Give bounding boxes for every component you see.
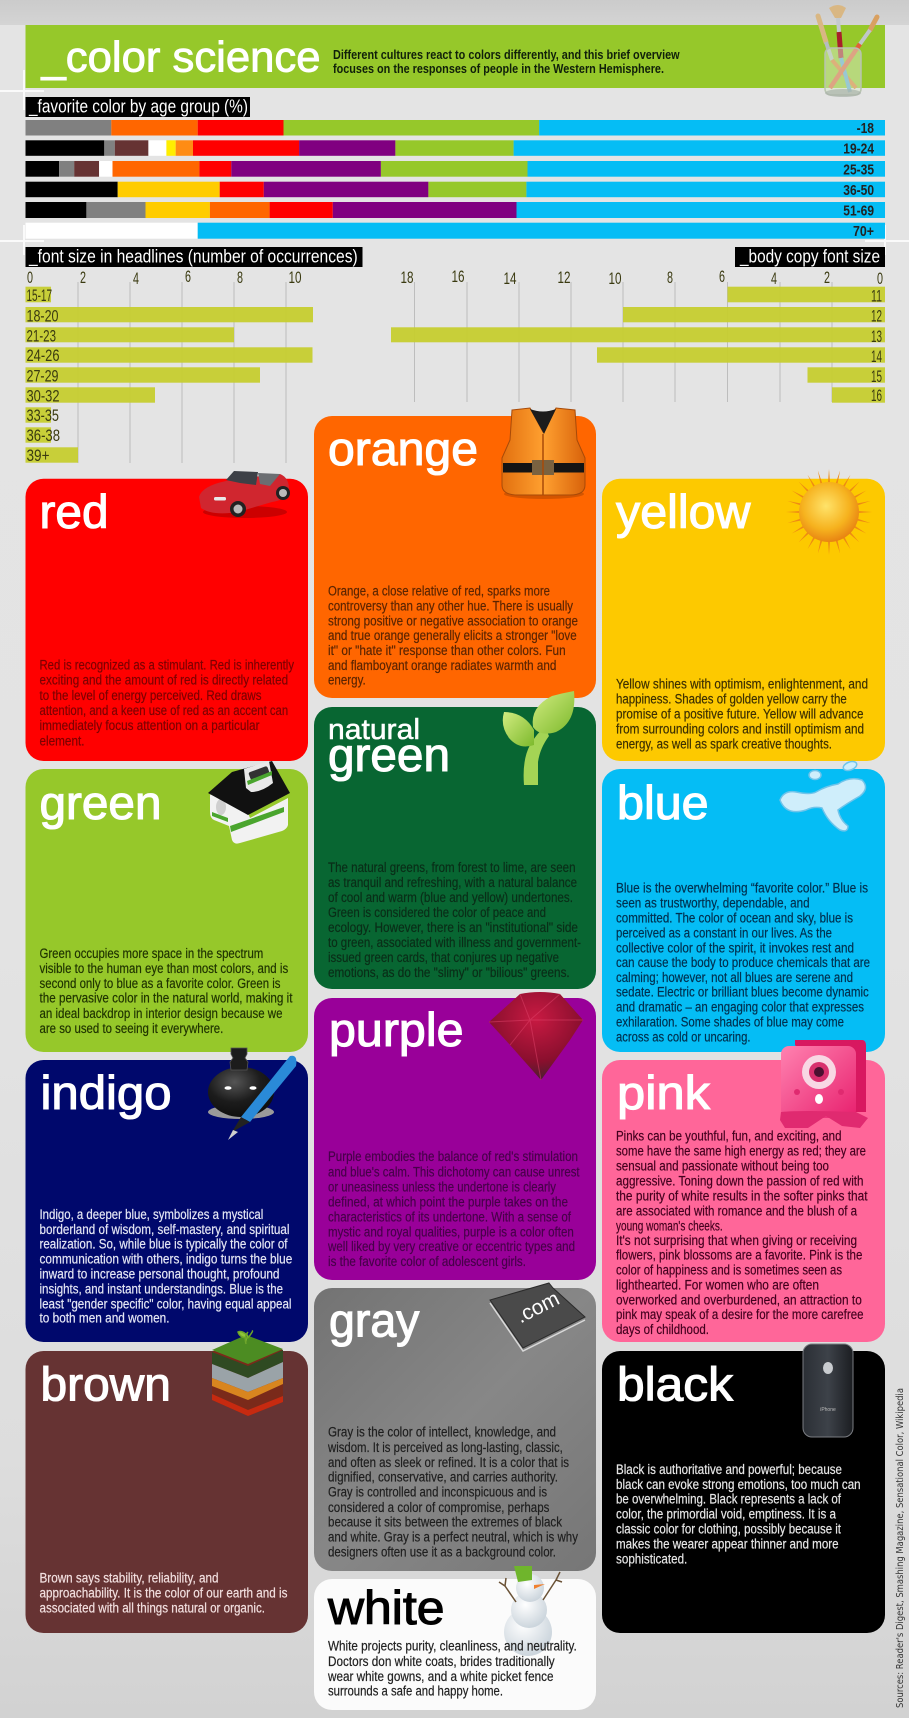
intro text xyxy=(333,48,680,76)
row labels: headline sizes: 24-26 xyxy=(26,346,60,365)
row labels: body copy sizes: 15 xyxy=(871,367,882,386)
icon: snowman xyxy=(499,1566,562,1656)
body text: The natural greens, from forest to lime, are seen xyxy=(328,860,576,875)
body text: associated with all things natural or organic. xyxy=(40,1600,265,1615)
body text: committed. The color of ocean and sky, blue is xyxy=(616,910,853,925)
panel: black xyxy=(602,1344,885,1633)
icon: sun xyxy=(786,469,872,555)
heading: green: green xyxy=(328,728,450,781)
row labels: headline sizes: 30-32 xyxy=(26,386,60,406)
body text: pink may speak of a desire for the more carefree xyxy=(616,1307,864,1322)
body text: to both men and women. xyxy=(40,1311,170,1326)
icon: ink bottle and pen xyxy=(208,1048,296,1140)
row labels: headline sizes: 33-35 xyxy=(26,406,59,425)
body text xyxy=(327,1149,580,1269)
icon: pink one-eyed monster xyxy=(780,1040,868,1128)
axis numbers: headlines: 0 xyxy=(27,268,33,287)
heading: green xyxy=(40,776,162,829)
body text: attention, and a keen use of red as an accent can xyxy=(40,703,288,718)
body text: issued green cards, that conjures up negative xyxy=(328,950,559,965)
panel: yellow xyxy=(602,469,885,761)
body text: borderland of wisdom, self-mastery, and spiritual xyxy=(40,1222,290,1237)
axis numbers: body copy: 2 xyxy=(824,268,830,287)
row labels: body copy sizes: 13 xyxy=(871,327,882,346)
body text: calming; however, not all blues are serene and xyxy=(616,970,853,985)
bar: 70 plus: 70+ xyxy=(853,223,874,240)
body text: approachability. It is the color of our earth and is xyxy=(40,1586,288,1601)
body text: lighthearted. For women who are often xyxy=(616,1277,819,1292)
body text: young woman's cheeks. xyxy=(616,1218,723,1233)
bar: 36-50 xyxy=(26,182,885,199)
bar: 51-69: 51-69 xyxy=(843,203,874,220)
body text: surrounds a safe and happy home. xyxy=(328,1684,503,1699)
body text: are so used to seeing it everywhere. xyxy=(40,1021,223,1036)
body text: and dramatic – an engaging color that expresses xyxy=(616,1000,864,1015)
body text: inward to increase personal thought, profound xyxy=(40,1267,280,1282)
bars: body copy sizes xyxy=(391,287,885,403)
axis numbers: body copy: 18 xyxy=(400,268,414,287)
body text: exciting and the amount of red is directly related xyxy=(40,673,288,688)
body text: energy, as well as spark creative thoughts. xyxy=(616,736,832,751)
body text: exhilaration. Some shades of blue may come xyxy=(616,1015,844,1030)
row labels: headline sizes: 21-23 xyxy=(26,326,56,346)
body text: to green, associated with illness and government- xyxy=(328,935,581,950)
body text xyxy=(616,676,868,751)
panel: brown xyxy=(26,1331,308,1633)
body text: Pinks can be youthful, fun, and exciting, and xyxy=(616,1129,842,1144)
panel: green xyxy=(26,761,308,1052)
heading: brown xyxy=(40,1358,171,1411)
icon: green sprout xyxy=(503,691,574,785)
body text: White projects purity, cleanliness, and neutrality. xyxy=(328,1639,577,1654)
heading: gray xyxy=(329,1294,420,1347)
body text: realization. So, while blue is typically the color of xyxy=(40,1236,288,1251)
body text: and often as sleek or refined. It is a color that is xyxy=(328,1455,569,1470)
axis numbers: body copy: 6 xyxy=(719,267,725,286)
body text xyxy=(40,1207,292,1326)
body text xyxy=(327,1639,577,1699)
icon: dot-com folder: .com xyxy=(512,1287,563,1328)
body text: from surrounding colors and instill optimism and xyxy=(616,721,864,736)
body text: Black is authoritative and powerful; because xyxy=(616,1462,842,1477)
icon: green and white house xyxy=(208,761,290,844)
body text: Gray is the color of intellect, knowledge, and xyxy=(328,1425,556,1440)
header banner xyxy=(26,5,885,97)
body text: be overwhelming. Black represents a lack of xyxy=(616,1492,841,1507)
heading: natural: natural xyxy=(328,714,420,746)
panel: gray xyxy=(314,1283,596,1571)
body text: Green occupies more space in the spectrum xyxy=(40,946,263,961)
body text: It's not surprising that when giving or receiving xyxy=(616,1233,857,1248)
body text: second only to blue as a favorite color. Green is xyxy=(40,976,281,991)
stacked bar chart: favorite color by age xyxy=(26,120,885,240)
panel: orange xyxy=(314,408,596,698)
axis numbers: headlines: 10 xyxy=(288,268,302,287)
body text: energy. xyxy=(328,673,366,688)
axis numbers: headlines: 8 xyxy=(237,268,243,287)
body text: the purity of white results in the softer pinks that xyxy=(616,1189,868,1204)
panel: blue xyxy=(602,760,885,1052)
heading: white xyxy=(327,1581,444,1634)
body text: wisdom. It is perceived as long-lasting, classic, xyxy=(327,1440,563,1455)
axis numbers: body copy: 16 xyxy=(452,267,464,286)
body text: Purple embodies the balance of red's stimulation xyxy=(328,1149,578,1164)
body text: sensual and passionate without being too xyxy=(616,1159,829,1174)
row labels: headline sizes xyxy=(26,286,60,465)
icon: smartphone xyxy=(803,1344,853,1437)
body text xyxy=(40,658,294,748)
bar: 36-50: 36-50 xyxy=(843,182,874,199)
body text: sedate. Electric or brilliant blues become dynamic xyxy=(616,985,869,1000)
axis numbers: headlines xyxy=(27,267,302,288)
body text: color of happiness and is sometimes seen as xyxy=(616,1262,842,1277)
body text: promise of a positive future. Yellow will advance xyxy=(616,706,864,721)
panel: white xyxy=(314,1566,596,1710)
heading: black xyxy=(617,1358,734,1411)
axis numbers: body copy: 10 xyxy=(608,269,622,288)
body text: of cool and warm (blue and yellow) undertones. xyxy=(328,890,573,905)
body text: communication with others, indigo turns the blue xyxy=(40,1252,292,1267)
heading: orange xyxy=(328,422,478,475)
icon: ruby gem xyxy=(489,992,583,1080)
row labels: headline sizes: 36-38 xyxy=(26,426,60,445)
panel: red xyxy=(26,471,308,761)
body text: characteristics of its undertone. With a sense of xyxy=(328,1209,571,1224)
panel: pink xyxy=(602,1040,885,1342)
body text: Brown says stability, reliability, and xyxy=(40,1571,218,1586)
axis numbers: body copy: 12 xyxy=(558,268,570,287)
axis numbers: headlines: 6 xyxy=(185,267,191,286)
body text: seen as trustworthy, dependable, and xyxy=(616,896,810,911)
bar chart: headline font sizes xyxy=(26,267,313,465)
sources credit: Sources: Reader's Digest, Smashing Magazine, Sensational Color, Wikipedia xyxy=(895,1388,906,1708)
heading: purple xyxy=(329,1003,464,1056)
body text: and true orange generally elicits a stronger "love xyxy=(328,628,577,643)
bar: under 18 xyxy=(26,120,885,137)
bar: 19-24: 19-24 xyxy=(843,141,875,158)
body text: Red is recognized as a stimulant. Red is inherently xyxy=(40,658,294,673)
icon: smartphone: iPhone xyxy=(820,1407,836,1413)
heading: pink xyxy=(617,1066,711,1119)
heading: favorite color by age group: _favorite color by age group (%) xyxy=(28,96,248,118)
row labels: headline sizes: 27-29 xyxy=(26,366,58,386)
body text: makes the wearer appear thinner and more xyxy=(616,1536,839,1551)
body text: is the favorite color of adolescent girls. xyxy=(328,1254,526,1269)
body text xyxy=(328,860,581,980)
body text: it" or "hate it" response than other colors. Fun xyxy=(328,643,566,658)
heading: body copy font size: _body copy font size xyxy=(739,246,880,268)
row labels: body copy sizes: 12 xyxy=(871,306,882,326)
body text: emotions, as do the "slimy" or "bilious" greens. xyxy=(328,965,570,980)
body text: considered a color of compromise, perhaps xyxy=(328,1500,550,1515)
body text: and white. Gray is a perfect neutral, which is why xyxy=(328,1529,578,1544)
body text: and blue's calm. This dichotomy can cause unrest xyxy=(328,1164,580,1179)
body text: insights, and instant understandings. Blue is the xyxy=(40,1281,283,1296)
body text: to the level of energy perceived. Red draws xyxy=(40,688,262,703)
body text: Green is considered the color of peace and xyxy=(328,905,546,920)
heading: yellow xyxy=(616,485,752,538)
body text: and flamboyant orange radiates warmth and xyxy=(328,658,556,673)
row labels: body copy sizes xyxy=(871,286,882,405)
heading: red xyxy=(40,485,108,538)
row labels: body copy sizes: 11 xyxy=(871,286,882,306)
axis numbers: headlines: 4 xyxy=(133,269,139,288)
row labels: headline sizes: 15-17 xyxy=(26,286,52,305)
row labels: body copy sizes: 16 xyxy=(871,386,882,405)
body text: Yellow shines with optimism, enlightenment, and xyxy=(616,676,868,691)
bar chart: body copy font sizes xyxy=(391,267,885,405)
icon: paint brushes in a jar xyxy=(818,5,877,97)
body text: immediately focus attention on a particular xyxy=(40,718,260,733)
body text: color, the primordial void, emptiness. It is a xyxy=(616,1507,836,1522)
body text: an ideal backdrop in interior design because we xyxy=(40,1006,282,1021)
body text: flowers, pink blossoms are a favorite. Pink is the xyxy=(616,1248,862,1263)
body text: controversy than any other hue. There is usually xyxy=(328,598,573,613)
body text: can cause the body to produce chemicals that are xyxy=(616,955,870,970)
row labels: headline sizes: 18-20 xyxy=(26,306,58,326)
body text: perceived as a constant in our lives. As the xyxy=(616,925,832,940)
body text: black can evoke strong emotions, too much can xyxy=(616,1477,861,1492)
panel: natural green xyxy=(314,691,596,989)
body text: least "gender specific" color, having equal appeal xyxy=(40,1296,292,1311)
body text xyxy=(40,1571,288,1615)
body text: element. xyxy=(40,733,84,748)
body text xyxy=(616,880,870,1045)
bar: 19-24 xyxy=(26,140,885,158)
icon: water splash xyxy=(780,760,866,831)
body text: Indigo, a deeper blue, symbolizes a mystical xyxy=(40,1207,263,1222)
icon: dot-com folder xyxy=(490,1283,585,1351)
row labels: body copy sizes: 14 xyxy=(871,347,882,366)
body text: days of childhood. xyxy=(616,1322,709,1337)
axis numbers: body copy: 0 xyxy=(877,269,883,288)
intro text: focuses on the responses of people in the Western Hemisphere. xyxy=(333,62,664,76)
axis numbers: body copy xyxy=(400,267,883,288)
body text: sophisticated. xyxy=(616,1551,687,1566)
body text: Doctors don white coats, brides traditionally xyxy=(328,1654,555,1669)
body text: across as cold or uncaring. xyxy=(616,1030,750,1045)
body text: collective color of the spirit, it invokes rest and xyxy=(616,940,854,955)
heading: blue xyxy=(617,776,709,829)
body text: as tranquil and refreshing, with a natural balance xyxy=(328,875,577,890)
body text: or uneasiness unless the undertone is clearly xyxy=(328,1179,556,1194)
icon: red convertible car xyxy=(199,471,290,518)
axis numbers: body copy: 8 xyxy=(667,268,673,287)
body text: some have the same high energy as red; they are xyxy=(616,1144,866,1159)
body text: happiness. Shades of golden yellow carry the xyxy=(616,691,847,706)
bar: 51-69 xyxy=(26,202,885,220)
icon: life vest xyxy=(502,408,585,499)
body text: the pervasive color in the natural world, making it xyxy=(40,991,293,1006)
body text: are associated with romance and the blush of a xyxy=(616,1203,857,1218)
body text xyxy=(327,1425,578,1560)
body text xyxy=(40,946,293,1036)
body text: aggressive. Toning down the passion of red with xyxy=(616,1174,864,1189)
title: _color science xyxy=(40,34,321,82)
body text xyxy=(616,1129,868,1337)
body text xyxy=(616,1462,861,1566)
body text: designers often use it as a background color. xyxy=(328,1545,556,1560)
panel: indigo xyxy=(26,1048,308,1342)
icon: soil layer cube xyxy=(212,1331,283,1416)
bar: 25-35 xyxy=(26,161,885,178)
bars: headline sizes xyxy=(26,287,313,463)
body text: because it sits between the extremes of black xyxy=(328,1514,562,1529)
axis numbers: body copy: 14 xyxy=(504,269,516,288)
body text: mystic and royal qualities, purple is a color often xyxy=(328,1224,574,1239)
body text: overworked and overburdened, an attraction to xyxy=(616,1292,862,1307)
body text: ecology. However, there is an "institutional" side xyxy=(328,920,578,935)
body text: wear white gowns, and a white picket fence xyxy=(327,1669,554,1684)
bar: 25-35: 25-35 xyxy=(843,161,874,178)
intro text: Different cultures react to colors differently, and this brief overview xyxy=(333,48,680,62)
heading: indigo xyxy=(40,1066,172,1119)
body text: well liked by very creative or eccentric types and xyxy=(327,1239,575,1254)
body text: Gray is controlled and inconspicuous and is xyxy=(328,1485,547,1500)
body text: classic color for clothing, possibly because it xyxy=(616,1522,841,1537)
panel: purple xyxy=(314,992,596,1280)
body text: strong positive or negative association to orange xyxy=(328,613,578,628)
row labels: headline sizes: 39+ xyxy=(26,446,50,465)
body text: dignified, conservative, and carries authority. xyxy=(328,1470,558,1485)
bar: 70 plus xyxy=(26,223,885,240)
axis numbers: headlines: 2 xyxy=(80,268,86,287)
body text: visible to the human eye than most colors, and is xyxy=(40,961,288,976)
body text: defined, at which point the purple takes on the xyxy=(328,1194,568,1209)
heading: font size in headlines: _font size in headlines (number of occurrences) xyxy=(28,246,358,268)
bar: under 18: -18 xyxy=(857,120,874,137)
body text: Orange, a close relative of red, sparks more xyxy=(328,583,550,598)
body text xyxy=(328,583,578,688)
body text: Blue is the overwhelming “favorite color.” Blue is xyxy=(616,880,868,895)
axis numbers: body copy: 4 xyxy=(771,269,777,288)
